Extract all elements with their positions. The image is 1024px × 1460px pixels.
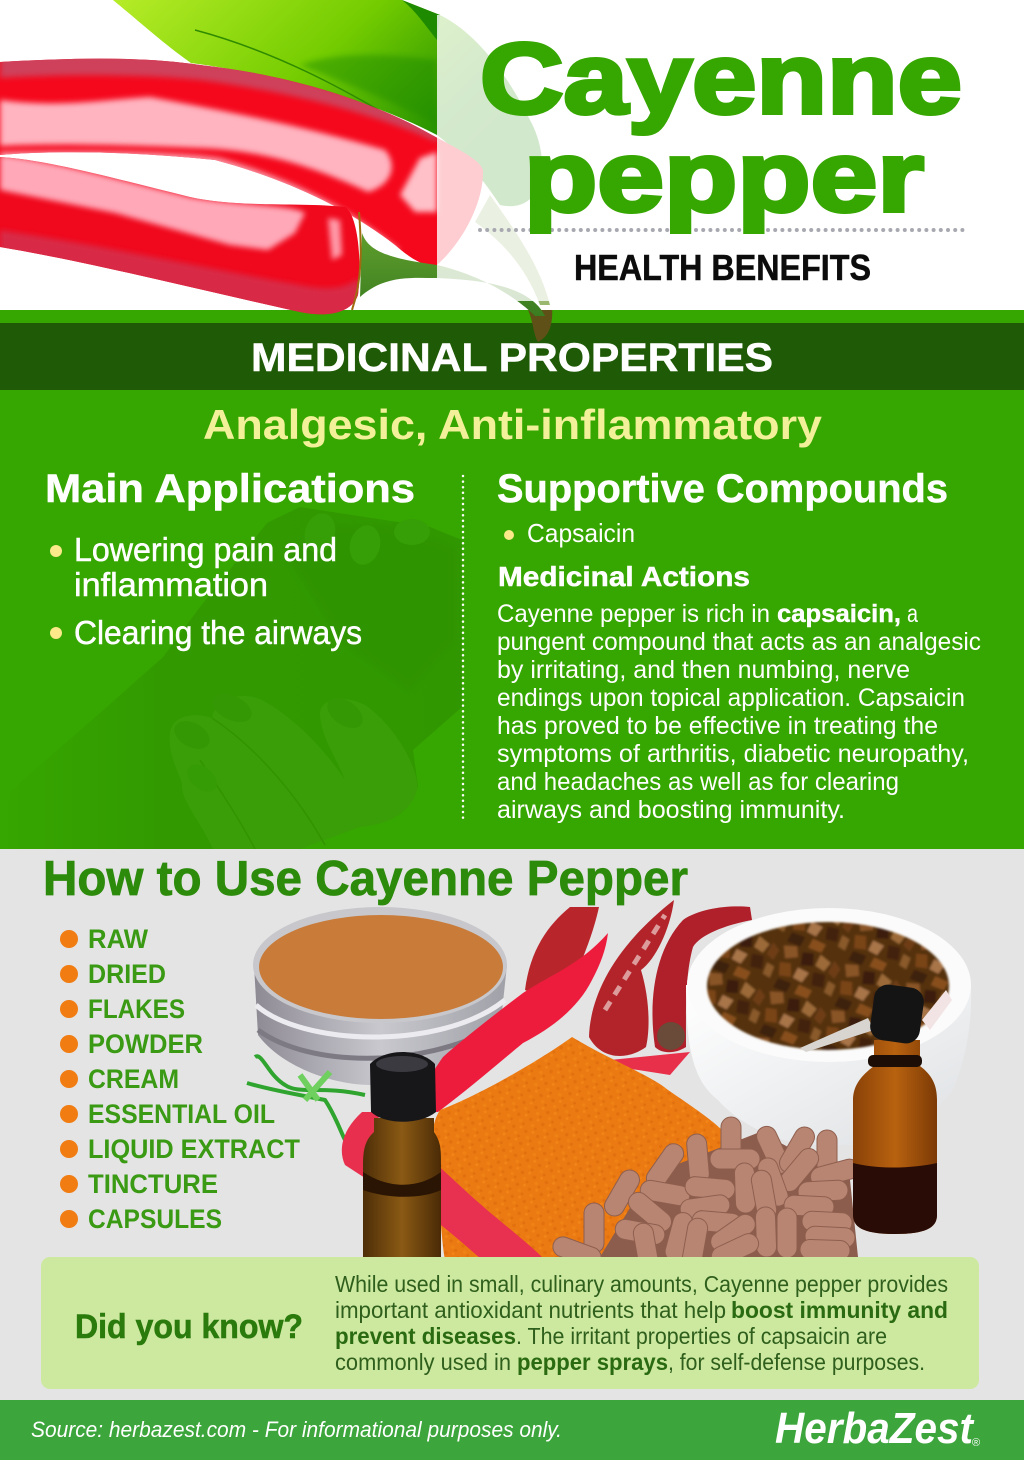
column: supportive compounds: Medicinal Actions	[498, 561, 750, 592]
source note: Source: herbazest.com - For informational purposes only.	[31, 1417, 562, 1442]
callout: did you know: While used in small, culinary amounts, Cayenne pepper provides	[335, 1271, 948, 1297]
callout: did you know: important antioxidant nutrients that help	[335, 1297, 726, 1323]
list: forms of use: LIQUID EXTRACT	[88, 1134, 300, 1164]
list: forms of use: FLAKES	[88, 994, 185, 1024]
image: cayenne products	[247, 900, 971, 1274]
column: supportive compounds: capsaicin,	[777, 600, 901, 628]
callout: did you know: commonly used in	[335, 1349, 511, 1375]
column: supportive compounds: by irritating, and then numbing, nerve	[497, 656, 910, 684]
panel: how to use	[0, 849, 1024, 1400]
footer	[0, 1400, 1024, 1460]
list: forms of use: ESSENTIAL OIL	[88, 1099, 275, 1129]
panel: header	[0, 0, 552, 316]
column: supportive compounds: symptoms of arthritis, diabetic neuropathy,	[497, 740, 969, 768]
image: lower fresh pepper back	[342, 1112, 380, 1178]
list: forms of use: POWDER	[88, 1029, 203, 1059]
title: HEALTH BENEFITS	[574, 247, 871, 288]
dotted rule	[480, 228, 964, 232]
callout: did you know: prevent diseases	[335, 1323, 516, 1349]
list: forms of use: CAPSULES	[88, 1204, 222, 1234]
callout: did you know: pepper sprays	[517, 1349, 668, 1375]
column: supportive compounds: endings upon topical application. Capsaicin	[497, 684, 965, 712]
list: forms of use: DRIED	[88, 959, 166, 989]
callout: did you know: Did you know?	[75, 1308, 303, 1346]
image: capsules	[552, 1116, 858, 1257]
column: main applications: Clearing the airways	[74, 614, 362, 651]
image: fresh red pepper	[435, 933, 608, 1112]
column: supportive compounds: pungent compound that acts as an analgesic	[497, 628, 981, 656]
heading: how to use: How to Use Cayenne Pepper	[43, 852, 688, 906]
image: chili peppers and leaf	[0, 0, 550, 330]
column: main applications	[45, 467, 415, 651]
image: left amber bottle	[363, 1052, 441, 1262]
callout: did you know: , for self-defense purposes.	[668, 1349, 925, 1375]
column: main applications: Main Applications	[45, 467, 415, 511]
list: forms of use: CREAM	[88, 1064, 179, 1094]
logo: HerbaZest: HerbaZest	[775, 1404, 975, 1453]
column: supportive compounds: Cayenne pepper is rich in	[497, 600, 770, 628]
panel: medicinal properties	[0, 302, 1024, 849]
list: forms of use: RAW	[88, 924, 148, 954]
image: hands silhouette	[0, 507, 462, 849]
translucent overlay	[437, 15, 567, 301]
column: main applications: inflammation	[74, 566, 268, 603]
image: white bowl with flakes	[686, 908, 971, 1145]
image: dried peppers	[525, 900, 752, 1075]
title: Cayenne	[480, 23, 962, 135]
column: supportive compounds: airways and boosting immunity.	[497, 796, 845, 824]
column: supportive compounds: Supportive Compounds	[497, 467, 948, 511]
column divider	[462, 476, 464, 820]
column: supportive compounds: and headaches as well as for clearing	[497, 768, 899, 796]
image: stem base	[524, 302, 552, 342]
column: supportive compounds	[497, 467, 981, 824]
column: supportive compounds: a	[907, 600, 918, 628]
heading: medicinal properties: MEDICINAL PROPERTIES	[251, 336, 773, 380]
image: right amber bottle	[800, 983, 952, 1234]
column: supportive compounds: Capsaicin	[527, 518, 635, 548]
image: green twine	[247, 1056, 365, 1140]
subheading: properties: Analgesic, Anti-inflammatory	[203, 401, 823, 448]
callout: did you know: boost immunity and	[731, 1297, 948, 1323]
column: supportive compounds: has proved to be effective in treating the	[497, 712, 938, 740]
callout: did you know	[41, 1257, 979, 1389]
title	[480, 23, 964, 288]
list: forms of use: TINCTURE	[88, 1169, 218, 1199]
image: tin of cream	[253, 907, 507, 1085]
image: lower fresh pepper front	[441, 1168, 542, 1257]
callout: did you know: . The irritant properties of capsaicin are	[516, 1323, 887, 1349]
registered mark: ®	[972, 1437, 980, 1449]
column: main applications: Lowering pain and	[74, 531, 337, 568]
list: forms of use	[60, 924, 300, 1234]
title: pepper	[524, 121, 924, 233]
image: pile of cayenne powder	[432, 1037, 726, 1260]
